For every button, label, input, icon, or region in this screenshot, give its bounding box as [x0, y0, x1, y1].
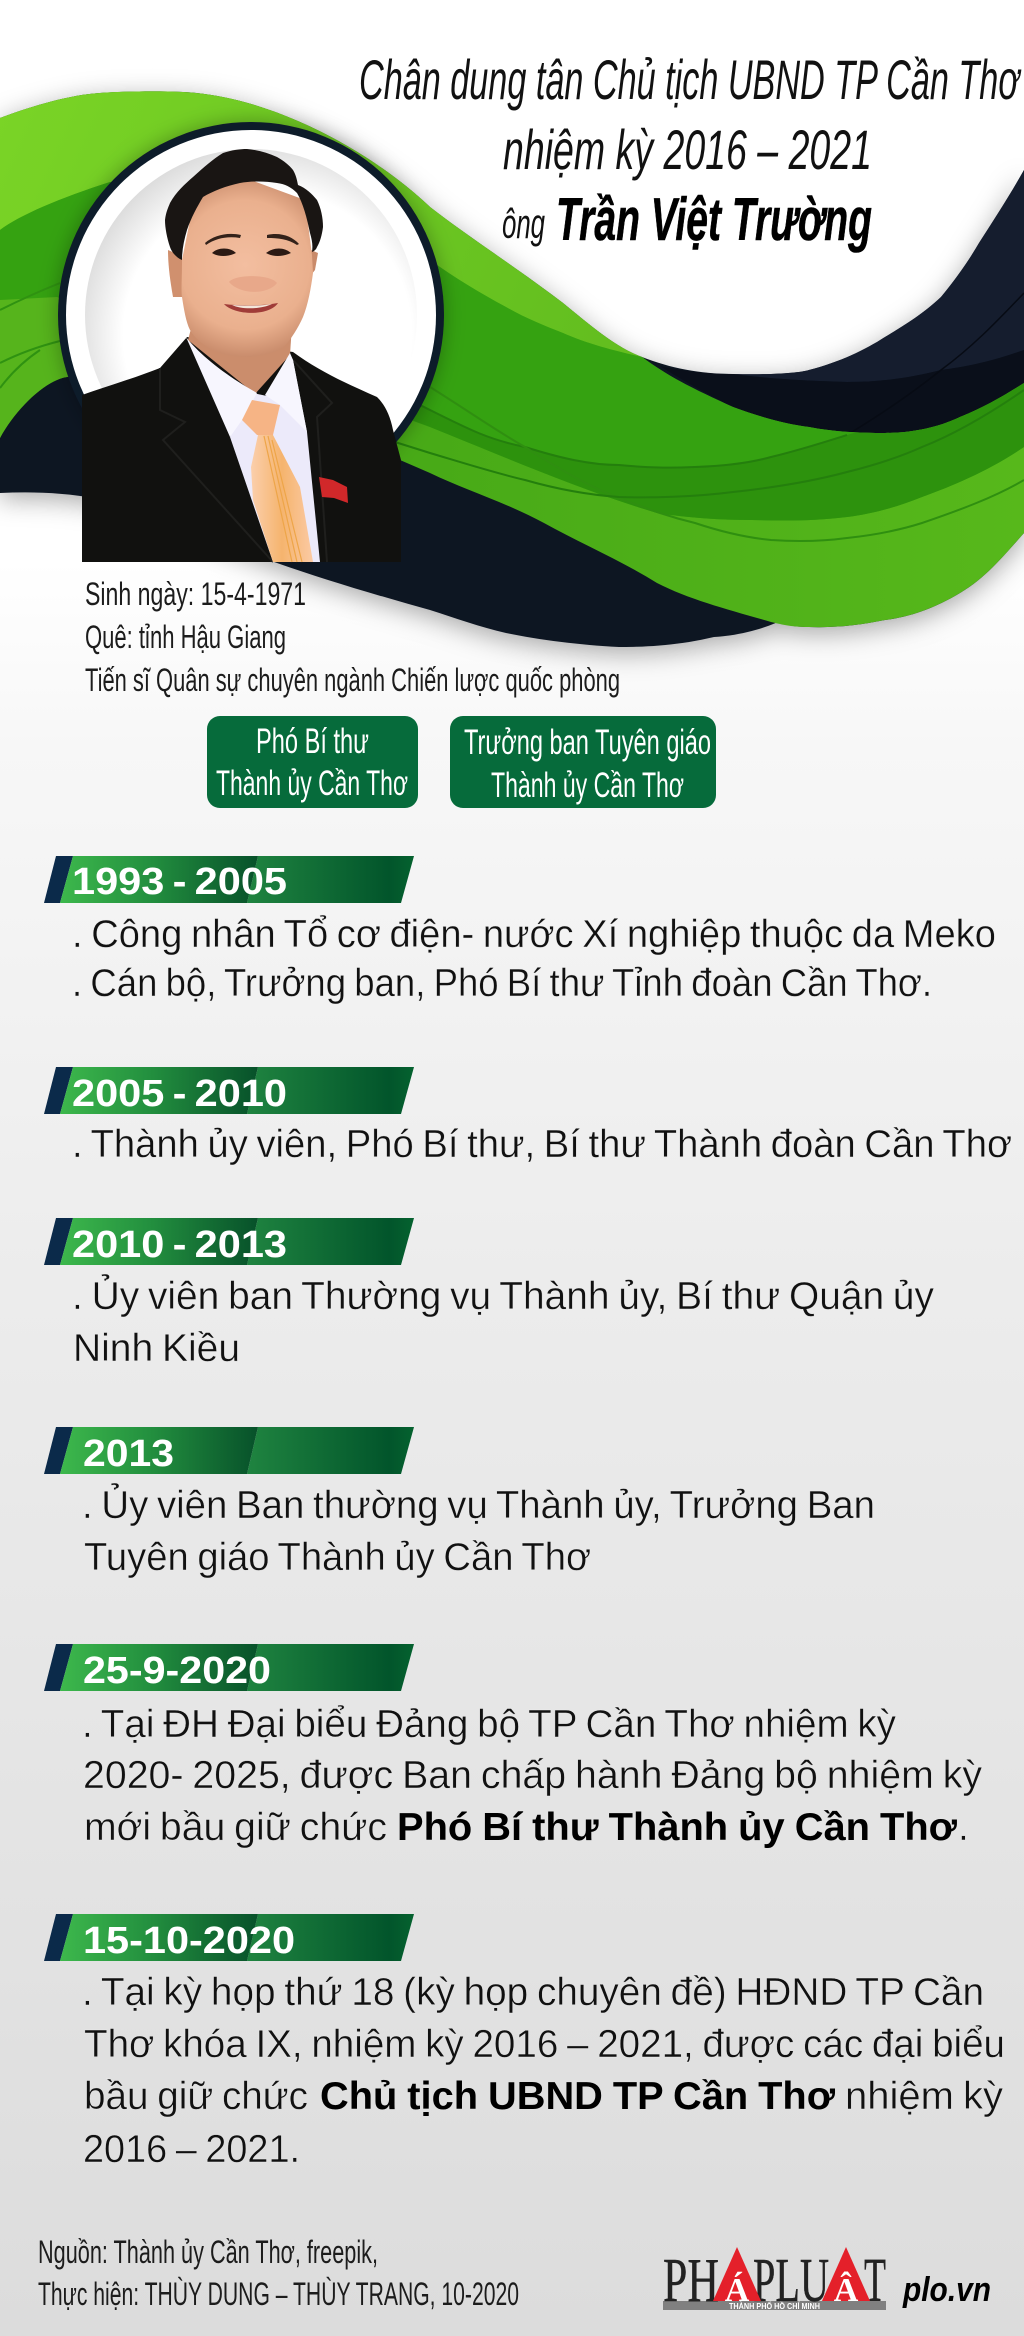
ribbon label: 15-10-2020	[83, 1920, 295, 1962]
line 3 lead: bầu giữ chức	[84, 2075, 308, 2118]
mouth	[224, 303, 278, 313]
section 2005-2010	[44, 1067, 1012, 1166]
line 1: . Công nhân Tổ cơ điện- nước Xí nghiệp thuộc da Meko	[72, 913, 996, 956]
tie knot	[242, 400, 280, 435]
inner shaded disc	[85, 149, 417, 481]
eyebrow left	[205, 234, 241, 245]
curved line 3	[395, 390, 1024, 497]
letter Â: Â	[834, 2271, 859, 2309]
section 2013	[44, 1427, 875, 1579]
nose	[229, 276, 277, 292]
line 1: . Ủy viên Ban thường vụ Thành ủy, Trưởng Ban	[82, 1483, 875, 1527]
line 2: Ninh Kiều	[73, 1327, 240, 1370]
line 2: Tuyên giáo Thành ủy Cần Thơ	[84, 1536, 591, 1579]
eye left	[212, 248, 236, 256]
ribbon label: 1993 - 2005	[72, 861, 287, 903]
line 3 tail: nhiệm kỳ	[845, 2075, 1004, 2118]
face	[182, 178, 313, 357]
birth date: Sinh ngày: 15-4-1971	[85, 576, 306, 612]
ear left	[168, 250, 182, 297]
curved line 1	[421, 405, 847, 468]
section 1993-2005	[44, 856, 996, 1005]
ribbon	[44, 1067, 414, 1114]
hair	[165, 149, 323, 260]
mid green zone	[0, 182, 1024, 521]
degree: Tiến sĩ Quân sự chuyên ngành Chiến lược quốc phòng	[85, 662, 620, 698]
ribbon	[44, 1644, 414, 1691]
suit	[82, 337, 401, 562]
darker lower stripe on dark wave	[660, 350, 1024, 433]
ear right	[311, 250, 318, 275]
curved line 2	[430, 386, 1024, 542]
teeth	[232, 304, 272, 308]
wordmark PLU: PLU	[753, 2247, 829, 2315]
position badge 1: Phó Bí thư	[256, 722, 369, 761]
position badge 2: Thành ủy Cần Thơ	[491, 766, 684, 805]
header wave graphic	[0, 80, 1024, 647]
wordmark T: T	[864, 2247, 886, 2315]
line 3 bold: Phó Bí thư Thành ủy Cần Thơ	[397, 1806, 957, 1849]
ribbon label: 2010 - 2013	[72, 1224, 287, 1266]
left lower green	[0, 297, 68, 438]
hometown: Quê: tỉnh Hậu Giang	[85, 619, 286, 655]
position badge 1	[207, 716, 418, 808]
eye right	[266, 248, 291, 256]
author: Thực hiện: THÙY DUNG – THÙY TRANG, 10-2020	[38, 2276, 519, 2312]
line 1: . Ủy viên ban Thường vụ Thành ủy, Bí thư Quận ủy	[72, 1274, 934, 1318]
party pin	[319, 477, 348, 503]
suit lapel seam right	[293, 360, 332, 562]
base bright green	[0, 80, 1024, 640]
Pháp Luật logo	[663, 2247, 991, 2315]
tie blade	[251, 435, 313, 562]
position badge 1: Thành ủy Cần Thơ	[216, 764, 408, 803]
ribbon label: 2005 - 2010	[72, 1073, 287, 1115]
source credits	[38, 2234, 519, 2312]
eyebrow right	[267, 234, 299, 245]
site: plo.vn	[902, 2271, 991, 2309]
ribbon	[44, 1914, 414, 1961]
line 3 lead: mới bầu giữ chức	[84, 1806, 387, 1849]
title	[359, 48, 1022, 253]
section 2010-2013	[44, 1218, 934, 1370]
line 2: Thơ khóa IX, nhiệm kỳ 2016 – 2021, được các đại biểu	[84, 2023, 1005, 2066]
darker green band	[380, 383, 1024, 521]
personal info	[85, 576, 620, 698]
line 2: 2020- 2025, được Ban chấp hành Đảng bộ nhiệm kỳ	[83, 1754, 982, 1797]
portrait circle	[58, 122, 444, 508]
grey bar	[663, 2301, 886, 2310]
suit lapel seam left	[160, 368, 273, 562]
line 2: . Cán bộ, Trưởng ban, Phó Bí thư Tỉnh đoàn Cần Thơ.	[72, 962, 932, 1005]
ribbon label: 2013	[83, 1433, 174, 1475]
position badge 2: Trưởng ban Tuyên giáo	[464, 723, 711, 762]
position badge 2	[450, 716, 716, 808]
dark ring	[58, 122, 444, 508]
source: Nguồn: Thành ủy Cần Thơ, freepik,	[38, 2234, 378, 2270]
wordmark PH: PH	[663, 2247, 719, 2315]
shirt	[230, 355, 320, 562]
green wave	[0, 80, 1024, 640]
line 3 bold: Chủ tịch UBND TP Cần Thơ	[320, 2075, 835, 2118]
collar left	[186, 337, 257, 437]
top light green	[0, 80, 660, 357]
ribbon	[44, 1218, 414, 1265]
dark navy wave	[0, 91, 1024, 647]
portrait of Trần Việt Trường	[82, 149, 401, 562]
line 1: . Tại kỳ họp thứ 18 (kỳ họp chuyên đề) HĐND TP Cần	[82, 1971, 984, 2014]
lighter upper stripe on dark wave	[733, 170, 1024, 382]
line 4: 2016 – 2021.	[83, 2128, 300, 2171]
tie stripes	[264, 436, 302, 562]
white disc	[66, 130, 436, 500]
ribbon	[44, 1427, 414, 1474]
line 3 period: .	[958, 1806, 969, 1849]
line 1: . Tại ĐH Đại biểu Đảng bộ TP Cần Thơ nhiệm kỳ	[82, 1703, 896, 1746]
neck	[188, 325, 292, 394]
title word ông: ông	[502, 200, 545, 247]
left curved lines	[0, 283, 60, 388]
collar right	[265, 353, 307, 432]
letter Á: Á	[725, 2272, 750, 2309]
tagline: THÀNH PHỐ HỒ CHÍ MINH	[729, 2301, 820, 2311]
line 1: . Thành ủy viên, Phó Bí thư, Bí thư Thành đoàn Cần Thơ	[72, 1123, 1012, 1166]
faint line on dark wave	[847, 293, 1024, 435]
red triangle 2	[822, 2247, 870, 2301]
ribbon	[44, 856, 414, 903]
section 15-10-2020	[44, 1914, 1005, 2171]
ribbon label: 25-9-2020	[83, 1650, 271, 1692]
red triangle 1	[713, 2247, 761, 2301]
section 25-9-2020	[44, 1644, 982, 1849]
